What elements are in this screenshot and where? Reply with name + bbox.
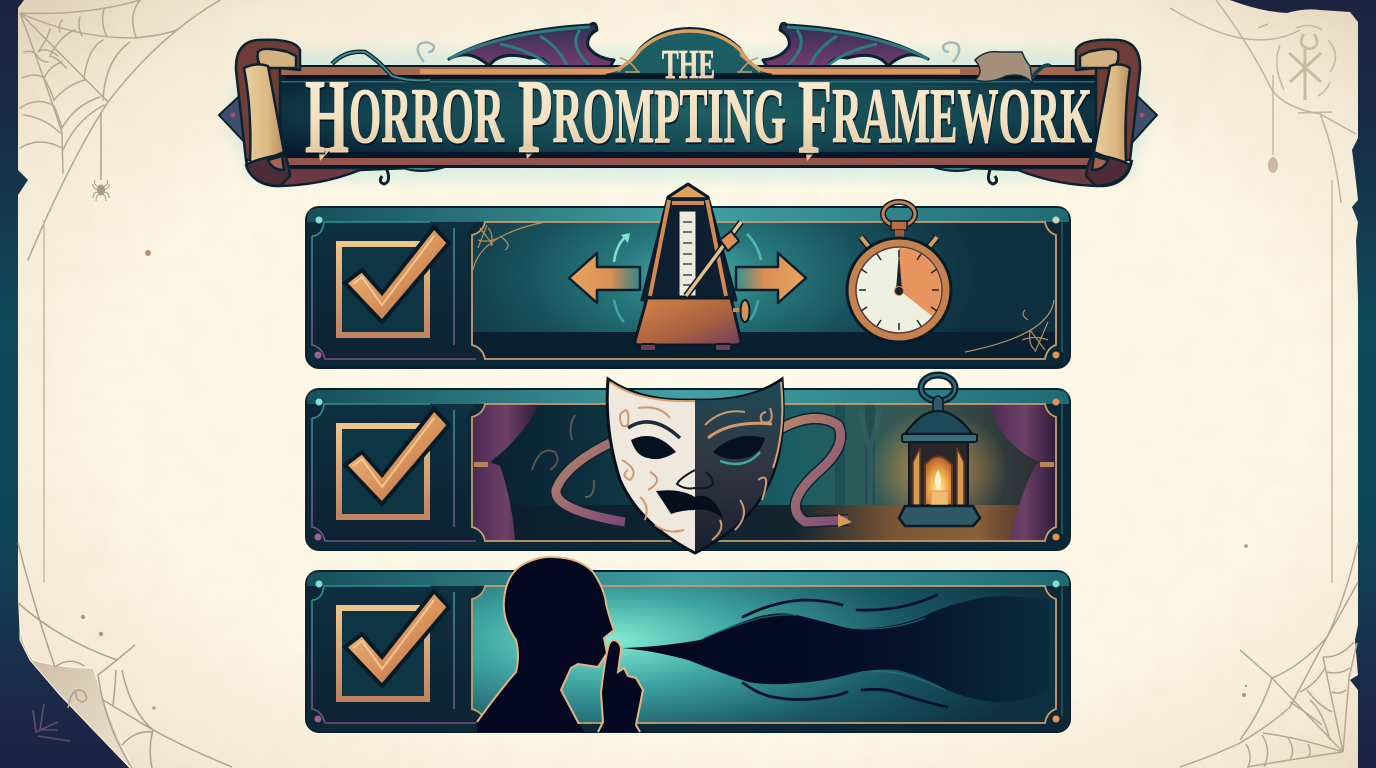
heading: title text: P — [519, 60, 554, 178]
icon: silhouette shushing — [477, 557, 643, 732]
main banner board — [268, 66, 1110, 167]
cobweb: top left — [20, 0, 220, 260]
title letter tails — [318, 148, 819, 161]
panel 1: pacing — [306, 184, 1070, 368]
side border lines — [44, 180, 1332, 583]
corner dots — [314, 580, 1060, 722]
heading: title text: RAMEWORK — [832, 72, 1092, 159]
title banner — [219, 23, 1157, 186]
scene background — [473, 222, 1055, 332]
icon: stopwatch — [847, 202, 951, 342]
icon: left scroll — [236, 40, 300, 186]
ornament swirls — [418, 42, 959, 62]
cobweb strands: top right — [1170, 0, 1356, 203]
scene border — [472, 586, 1056, 723]
heading: title text — [305, 58, 1093, 178]
ribbon tails — [246, 160, 410, 186]
panel frame — [306, 207, 1070, 368]
thorny vine — [332, 52, 430, 80]
swing arcs — [614, 233, 761, 322]
icon: comedy and tragedy mask — [607, 379, 783, 553]
scene background — [470, 584, 1060, 726]
banner glow — [225, 50, 1150, 180]
dark whisper plume — [622, 595, 1050, 707]
icon: rune circle top right — [1277, 25, 1336, 100]
heading: title text: ORROR — [350, 74, 506, 162]
heading: title text: ORROR — [349, 72, 505, 159]
scene border — [472, 222, 1056, 359]
arrow: right — [736, 253, 806, 303]
paper stains — [81, 250, 1248, 710]
stage background — [470, 402, 1060, 544]
heading: title text: H — [306, 60, 350, 178]
heading: title text: F — [799, 60, 833, 178]
right end diamond — [1129, 88, 1157, 146]
artist mark — [33, 704, 70, 741]
heading word: THE: THE — [662, 41, 715, 87]
icon: right bat wing — [763, 23, 928, 70]
panel frame — [306, 389, 1070, 550]
heading: title text: ROMPTING — [553, 72, 786, 159]
heading: title text: ROMPTING — [554, 74, 787, 162]
icon: hanging spider — [93, 112, 109, 201]
torn parchment scrap — [975, 52, 1033, 84]
center arch — [606, 28, 772, 74]
heading: title text: H — [305, 58, 349, 175]
panel 2: emotion — [306, 375, 1070, 553]
panel frame — [306, 571, 1070, 732]
cobweb: bottom right — [1180, 543, 1358, 767]
corner cobwebs — [473, 222, 1054, 352]
corner dots — [314, 398, 1060, 540]
icon: right scroll — [1076, 40, 1140, 186]
icon: left bat wing — [449, 23, 614, 70]
checkbox — [339, 409, 449, 517]
panel 3: silence — [306, 557, 1070, 732]
ribbon — [556, 418, 852, 527]
cobweb: bottom left curled corner — [18, 543, 232, 768]
folded paper corner shade — [20, 625, 133, 768]
icon: lantern — [899, 375, 980, 526]
checkbox — [339, 591, 449, 699]
checkbox — [339, 227, 449, 335]
heading: title text: RAMEWORK — [833, 74, 1093, 162]
faint stage swirls — [532, 415, 594, 497]
arrow: left — [569, 253, 640, 303]
corner dots — [314, 216, 1060, 358]
scene border — [472, 404, 1056, 541]
left end diamond — [219, 88, 248, 146]
heading: title text: P — [518, 58, 553, 175]
heading: title text: F — [798, 58, 832, 175]
icon: metronome — [635, 184, 750, 351]
